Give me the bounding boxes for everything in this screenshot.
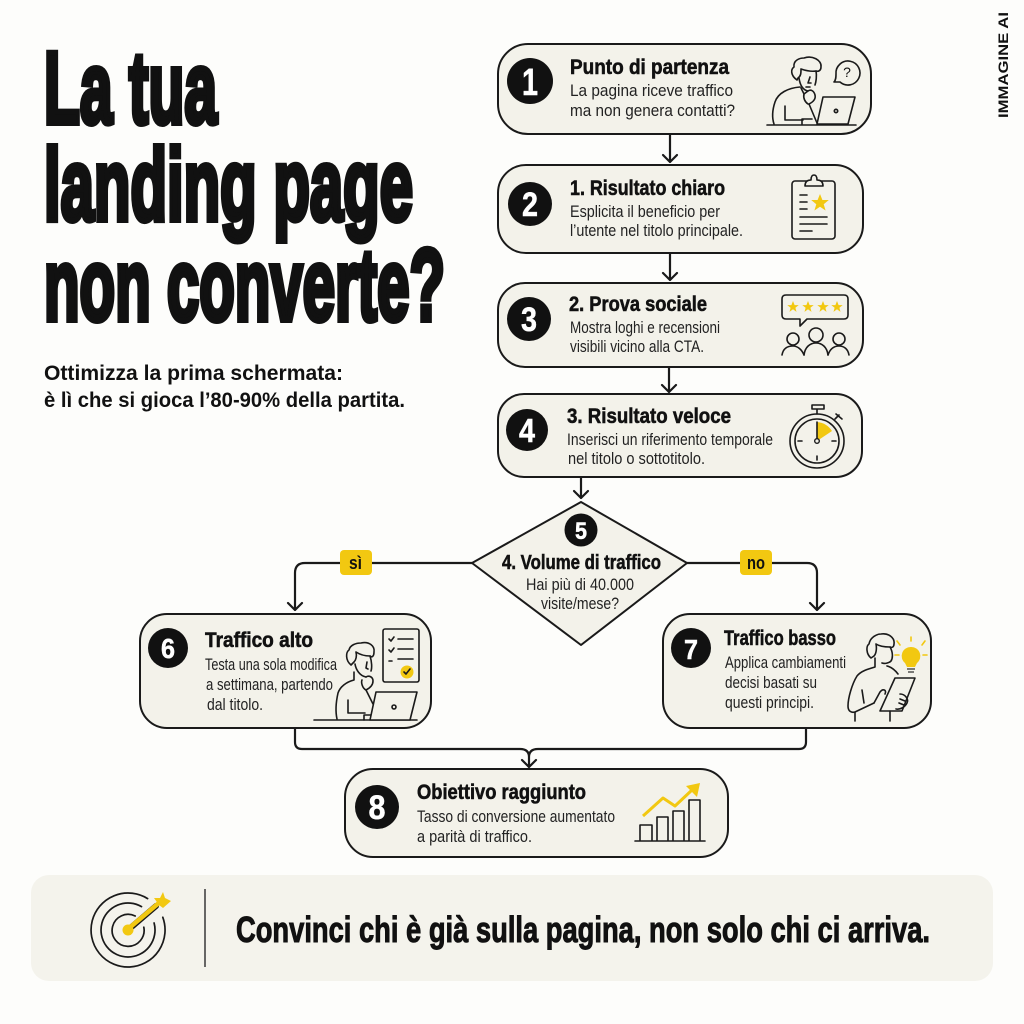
panel: step 4: 4 bbox=[519, 412, 536, 449]
label: sì bbox=[340, 550, 372, 575]
arrow: no branch bbox=[687, 563, 824, 610]
panel: goal reached bbox=[345, 769, 728, 857]
panel: step 3: 2. Prova sociale bbox=[569, 293, 707, 316]
icon: thinking person at laptop bbox=[767, 57, 860, 125]
subtitle: Ottimizza la prima schermata: bbox=[44, 362, 343, 385]
panel: bottom banner bbox=[31, 875, 993, 981]
panel: step 3 bbox=[498, 283, 863, 367]
panel: step 1 bbox=[498, 44, 871, 134]
panel: step 4: 3. Risultato veloce bbox=[567, 405, 731, 428]
panel: goal reached: Tasso di conversione aumentato bbox=[417, 807, 615, 826]
panel: goal reached: 8 bbox=[368, 789, 386, 827]
panel: high traffic: dal titolo. bbox=[207, 695, 263, 714]
icon: person with tablet and light bulb bbox=[848, 634, 927, 721]
panel: step 2: Esplicita il beneficio per bbox=[570, 202, 720, 221]
panel: step 1: 1 bbox=[522, 62, 538, 104]
vertical label: IMMAGINE AI bbox=[995, 12, 1011, 118]
subtitle: è lì che si gioca l’80-90% della partita. bbox=[44, 389, 405, 412]
icon: reviews and people bbox=[782, 295, 849, 355]
panel: high traffic: 6 bbox=[161, 633, 175, 664]
panel: low traffic: Traffico basso bbox=[724, 627, 836, 650]
panel: step 1: ? bbox=[843, 64, 851, 80]
panel: low traffic: questi principi. bbox=[725, 693, 814, 712]
panel: step 2: 1. Risultato chiaro bbox=[570, 177, 725, 200]
panel: decision diamond: visite/mese? bbox=[541, 594, 619, 613]
panel: step 2: 2 bbox=[522, 186, 538, 224]
arrow: merge to goal bbox=[295, 728, 806, 767]
panel: decision diamond: 4. Volume di traffico bbox=[502, 552, 661, 574]
arrow: step 4 to 5 bbox=[574, 477, 588, 498]
panel: low traffic: Applica cambiamenti bbox=[725, 653, 846, 672]
panel: low traffic bbox=[663, 614, 931, 728]
icon: growth chart bbox=[635, 783, 705, 841]
icon: person, laptop and checklist bbox=[314, 629, 419, 720]
panel: goal reached: a parità di traffico. bbox=[417, 827, 532, 846]
panel: step 1: Punto di partenza bbox=[570, 56, 729, 79]
panel: high traffic: Traffico alto bbox=[205, 629, 313, 652]
panel: low traffic: decisi basati su bbox=[725, 673, 817, 692]
panel: step 4: Inserisci un riferimento temporale bbox=[567, 430, 773, 449]
panel: step 4: nel titolo o sottotitolo. bbox=[568, 449, 705, 468]
arrow: step 3 to 4 bbox=[662, 367, 676, 392]
panel: high traffic: a settimana, partendo bbox=[206, 675, 333, 694]
panel: step 2 bbox=[498, 165, 863, 253]
arrow: step 2 to 3 bbox=[663, 253, 677, 280]
panel: high traffic bbox=[140, 614, 431, 728]
arrow: step 1 to 2 bbox=[663, 134, 677, 162]
panel: step 2: l’utente nel titolo principale. bbox=[570, 221, 743, 240]
panel: step 1: La pagina riceve traffico bbox=[570, 81, 733, 100]
panel: decision diamond: Hai più di 40.000 bbox=[526, 575, 634, 594]
label: no bbox=[740, 550, 772, 575]
title bbox=[44, 31, 445, 342]
label: sì: sì bbox=[349, 553, 362, 573]
panel: decision diamond: 5 bbox=[575, 518, 587, 545]
icon: stopwatch bbox=[790, 405, 844, 468]
label: no: no bbox=[747, 553, 765, 573]
panel: step 4 bbox=[498, 394, 862, 477]
panel: step 3: visibili vicino alla CTA. bbox=[570, 337, 704, 356]
panel: low traffic: 7 bbox=[684, 634, 698, 665]
panel: step 1: ma non genera contatti? bbox=[570, 101, 735, 120]
panel: decision diamond bbox=[472, 502, 687, 645]
panel: high traffic: Testa una sola modifica bbox=[205, 655, 337, 674]
title: non converte? bbox=[44, 228, 445, 342]
icon: clipboard with star bbox=[792, 175, 835, 239]
title: La tua bbox=[44, 31, 218, 145]
panel: step 3: 3 bbox=[521, 301, 537, 339]
title: landing page bbox=[44, 128, 413, 242]
arrow: yes branch bbox=[288, 563, 472, 610]
panel: step 3: Mostra loghi e recensioni bbox=[570, 318, 720, 337]
subtitle bbox=[44, 362, 405, 412]
icon: target with dart bbox=[91, 892, 171, 967]
panel: goal reached: Obiettivo raggiunto bbox=[417, 781, 586, 804]
